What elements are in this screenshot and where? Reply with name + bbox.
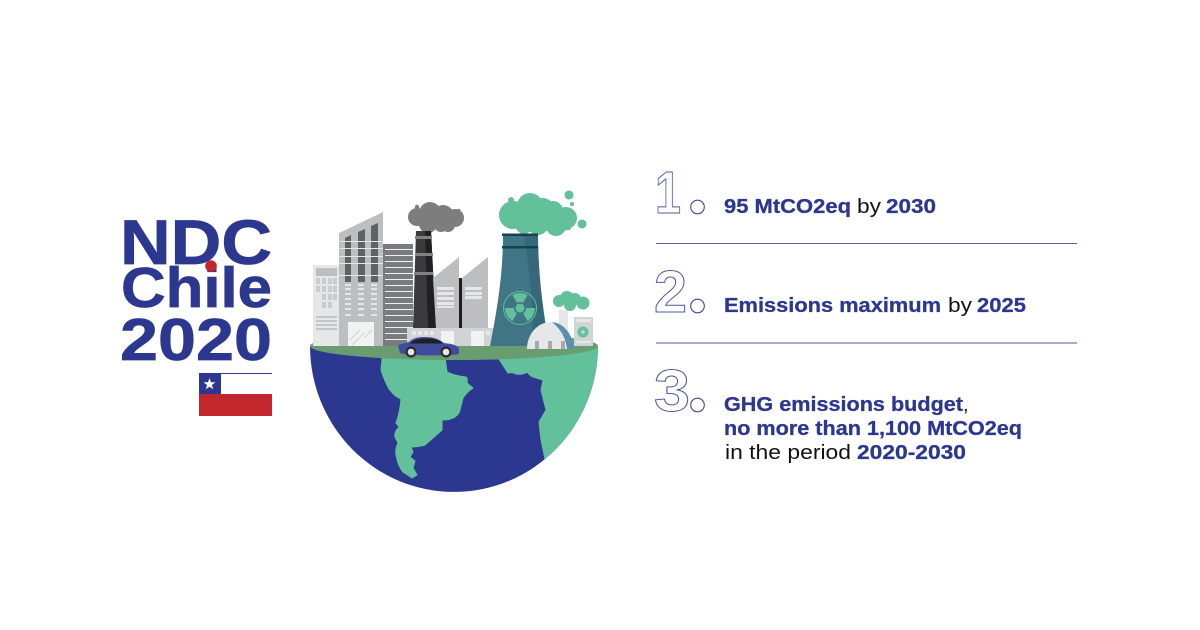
icon: radiation symbol: [503, 292, 537, 324]
item 2: Emissions maximum by 2025: 2: [654, 259, 687, 325]
icon: Chilean flag: [199, 373, 272, 416]
grey smoke cloud: [408, 202, 464, 233]
cooling tower: [490, 234, 549, 346]
small reactor building: [574, 317, 593, 346]
item 2: Emissions maximum by 2025: [654, 259, 1026, 325]
divider 1: [656, 243, 1077, 244]
small tower with steam: [553, 291, 590, 346]
item 3: GHG emissions budget: GHG emissions budget: [724, 394, 963, 416]
item 2: Emissions maximum by 2025: Emissions maximum: [724, 295, 941, 317]
title: NDC Chile 2020: Chile: [121, 256, 272, 320]
ground band: [310, 332, 598, 360]
divider 2: [656, 342, 1077, 344]
globe hemisphere: [310, 340, 600, 495]
item 3: GHG emissions budget: [654, 358, 1022, 464]
factory halls: [433, 257, 488, 328]
item 1: 95 MtCO2eq by 2030: 1: [655, 160, 681, 226]
green steam cloud: [499, 190, 586, 236]
item 3: GHG emissions budget: 3: [654, 358, 690, 424]
low building: [407, 328, 495, 346]
item 1: 95 MtCO2eq by 2030: 95 MtCO2eq: [724, 196, 851, 218]
item 1: 95 MtCO2eq by 2030: by: [857, 196, 881, 218]
item 3: GHG emissions budget: no more than 1,100 MtCO2eq: [724, 418, 1022, 440]
item 2: Emissions maximum by 2025: by: [948, 295, 972, 317]
item 3: GHG emissions budget: ,: [963, 394, 969, 416]
title: NDC Chile 2020: NDC: [120, 208, 272, 278]
item 1: 95 MtCO2eq by 2030: 2030: [886, 196, 936, 218]
pale office building: [313, 265, 339, 346]
striped building: [383, 244, 413, 346]
infographic canvas: [122, 172, 1077, 492]
illustration: globe with city and power plants: [310, 190, 600, 495]
tall grey tower: [339, 212, 384, 346]
item 3: GHG emissions budget: in the period: [725, 442, 851, 464]
item 2: Emissions maximum by 2025: 2025: [977, 295, 1026, 317]
title: NDC Chile 2020: 2020: [120, 307, 272, 373]
title: NDC Chile 2020: [120, 208, 272, 373]
black chimney: [413, 231, 436, 328]
item 1: 95 MtCO2eq by 2030: [655, 160, 936, 226]
item 3: GHG emissions budget: 2020-2030: [857, 442, 966, 464]
car: [398, 337, 459, 358]
nuclear dome: [527, 322, 574, 349]
